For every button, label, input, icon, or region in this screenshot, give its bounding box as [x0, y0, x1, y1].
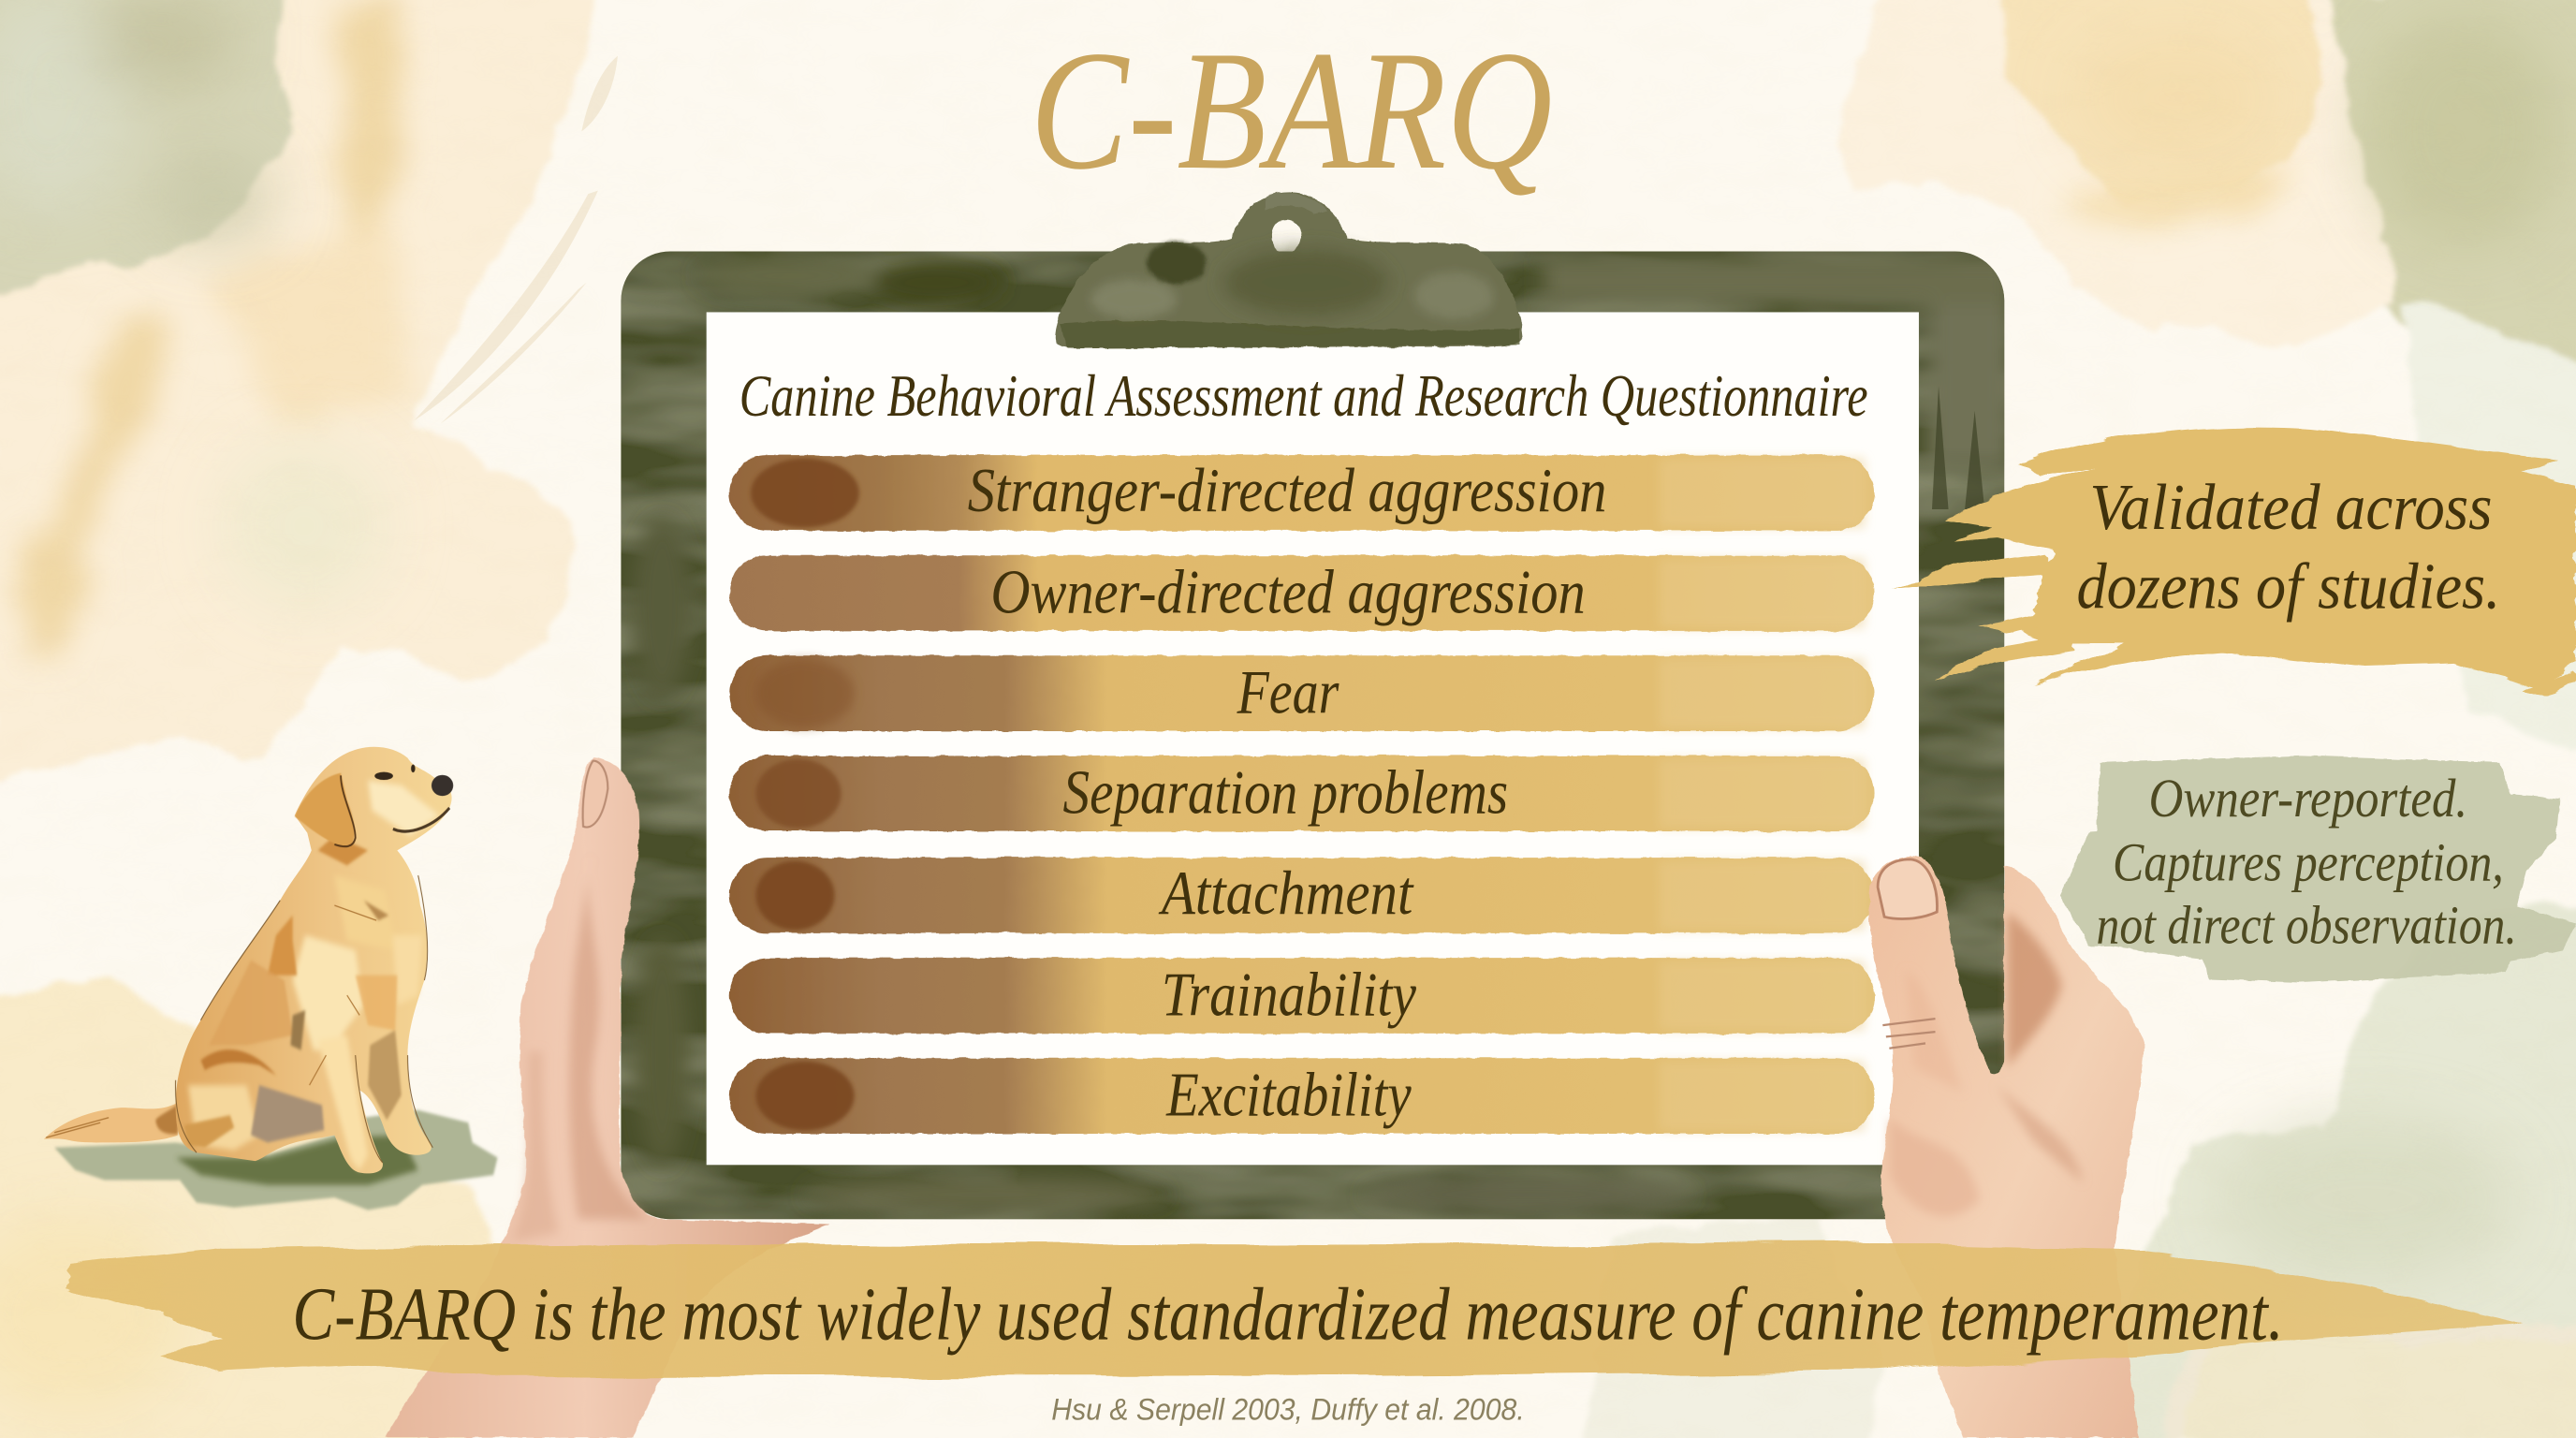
callout: owner-reported caveat: Captures perception, [2113, 832, 2504, 893]
bar: excitability [729, 1058, 1875, 1134]
clipboard [621, 192, 2012, 1219]
bar: trainability: Trainability [1162, 961, 1416, 1030]
clipboard board [621, 252, 2012, 1219]
title: C-BARQ [1030, 16, 1553, 205]
metal clip [1055, 192, 1523, 348]
fur dark patches [184, 835, 402, 1148]
bar: fear: Fear [1237, 659, 1339, 727]
left hand holding clipboard [385, 757, 829, 1438]
outline strokes [175, 875, 432, 1163]
bar: trainability [729, 958, 1875, 1034]
bar: separation problems: Separation problems [1063, 759, 1508, 828]
thumbnail [1878, 859, 1937, 918]
questionnaire bars [729, 455, 1875, 1134]
tail [44, 1103, 178, 1142]
bar: attachment [729, 858, 1875, 933]
faint dry-brush strokes [414, 56, 618, 424]
bar: stranger-directed aggression: Stranger-directed aggression [968, 457, 1606, 525]
callout: validated across dozens of studies: dozens of studies. [2076, 550, 2500, 623]
bar: excitability: Excitability [1165, 1062, 1412, 1130]
takeaway banner [66, 1242, 2522, 1377]
ear [295, 773, 355, 848]
bar: stranger-directed aggression [729, 455, 1875, 531]
clipboard paper [707, 312, 1919, 1165]
callout: validated across dozens of studies [1891, 426, 2576, 697]
source citation: Hsu & Serpell 2003, Duffy et al. 2008. [1051, 1392, 1525, 1426]
eye, nose, mouth [374, 772, 393, 780]
fur light patches [188, 781, 439, 1170]
bar: owner-directed aggression [729, 555, 1875, 631]
ground shadow [54, 1110, 498, 1210]
bar: separation problems [729, 756, 1875, 831]
bar: fear [729, 655, 1875, 731]
bar: attachment: Attachment [1158, 859, 1414, 928]
callout: owner-reported caveat: Owner-reported. [2149, 768, 2467, 829]
illustration: golden retriever [44, 747, 498, 1210]
subtitle: Canine Behavioral Assessment and Research Questionnaire [739, 363, 1868, 429]
callout: owner-reported caveat: not direct observation. [2097, 894, 2517, 955]
body [176, 747, 452, 1173]
callout: owner-reported caveat [2060, 756, 2576, 983]
callout: validated across dozens of studies: Validated across [2089, 471, 2492, 544]
tonal streaks [17, 0, 2300, 657]
right hand holding clipboard [1869, 856, 2144, 1438]
bar: owner-directed aggression: Owner-directed aggression [990, 559, 1586, 627]
